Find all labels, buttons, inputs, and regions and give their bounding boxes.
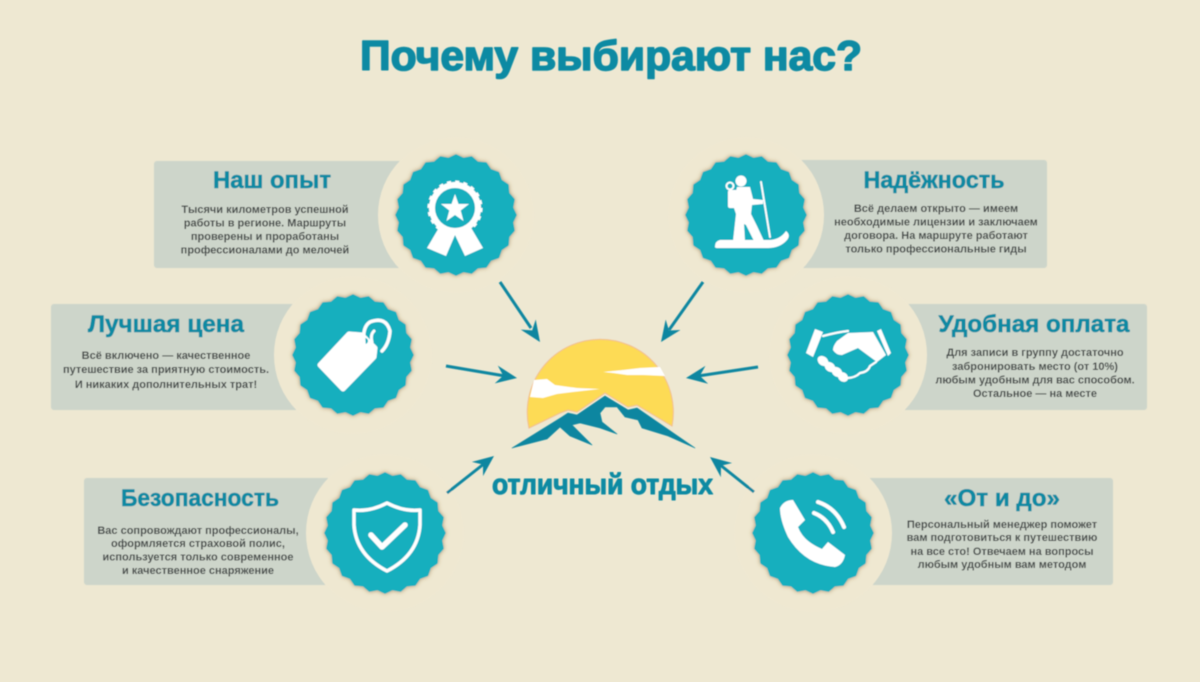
text: Удобная оплата: Для записи в группу достаточно — [946, 347, 1124, 359]
icon: shield with check — [326, 474, 444, 592]
heading: От и до: «От и до» — [944, 485, 1060, 512]
central logo: sun and mountains — [492, 339, 713, 501]
text: Удобная оплата: Остальное — на месте — [973, 388, 1097, 400]
panel: От и до — [734, 454, 1113, 612]
text: Безопасность: Вас сопровождают профессионалы, — [97, 525, 299, 537]
panel: Лучшая цена — [51, 276, 432, 434]
arrow: bottom-left — [447, 449, 500, 493]
heading: Надёжность: Надёжность — [864, 167, 1004, 194]
text: Наш опыт: профессионалами до мелочей — [181, 244, 349, 256]
title: Почему выбирают нас? — [360, 32, 862, 79]
text: Наш опыт: Тысячи километров успешной — [181, 204, 349, 216]
panel: Удобная оплата — [769, 276, 1147, 434]
icon: handshake — [788, 296, 908, 414]
panel: Безопасность — [84, 454, 464, 612]
text: Наш опыт: работы в регионе. Маршруты — [184, 218, 346, 230]
arrow: top-right — [654, 282, 703, 347]
icon: phone — [754, 474, 872, 592]
text: Безопасность: и качественное снаряжение — [122, 565, 274, 577]
text: Наш опыт: проверены и проработаны — [191, 231, 339, 243]
text: Лучшая цена: путешествие за приятную стоимость. — [63, 364, 269, 376]
text: Лучшая цена: И никаких дополнительных трат! — [75, 379, 257, 391]
mountains — [512, 396, 695, 448]
arrow: bottom-right — [704, 450, 754, 492]
logo text: отличный отдых — [492, 469, 713, 501]
panel: Надёжность — [668, 137, 1047, 293]
text: Лучшая цена: Всё включено — качественное — [82, 350, 250, 362]
sun — [527, 339, 673, 428]
icon: price tag — [294, 296, 412, 414]
text: Безопасность: используется только современное — [103, 552, 293, 564]
arrow: middle-right — [685, 366, 758, 387]
text: Удобная оплата: забронировать место (от 10%) — [952, 361, 1118, 373]
text: От и до: Персональный менеджер поможет — [907, 519, 1098, 531]
heading: Наш опыт: Наш опыт — [213, 167, 331, 194]
text: Надёжность: договора. На маршруте работают — [844, 230, 1028, 242]
arrow: top-left — [500, 282, 547, 347]
heading: Лучшая цена: Лучшая цена — [88, 311, 245, 338]
text: Надёжность: Всё делаем открыто — имеем — [854, 203, 1018, 215]
heading: Безопасность: Безопасность — [121, 485, 279, 512]
text: Надёжность: только профессиональные гиды — [845, 244, 1027, 256]
icon: hiker on snowshoe — [686, 156, 806, 274]
text: От и до: любым удобным вам методом — [918, 559, 1086, 571]
text: От и до: вам подготовиться к путешествию — [907, 532, 1097, 544]
heading: Удобная оплата: Удобная оплата — [938, 311, 1130, 338]
icon: award badge — [396, 156, 516, 274]
panel: Наш опыт — [154, 137, 534, 293]
text: От и до: на все сто! Отвечаем на вопросы — [910, 546, 1094, 558]
arrow: middle-left — [446, 366, 519, 387]
text: Безопасность: оформляется страховой полис, — [111, 538, 285, 550]
clouds — [530, 367, 665, 398]
text: Надёжность: необходимые лицензии и заключаем — [834, 216, 1038, 228]
text: Удобная оплата: любым удобным для вас способом. — [935, 374, 1135, 386]
